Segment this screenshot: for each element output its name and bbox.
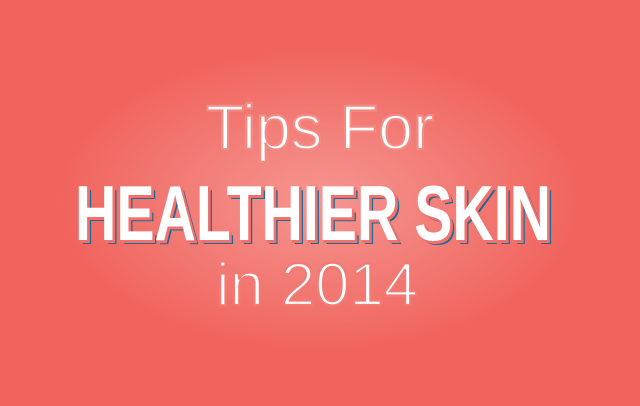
heading: in 2014: in 2014 [216,251,418,318]
heading: Tips For: Tips For [206,93,434,163]
